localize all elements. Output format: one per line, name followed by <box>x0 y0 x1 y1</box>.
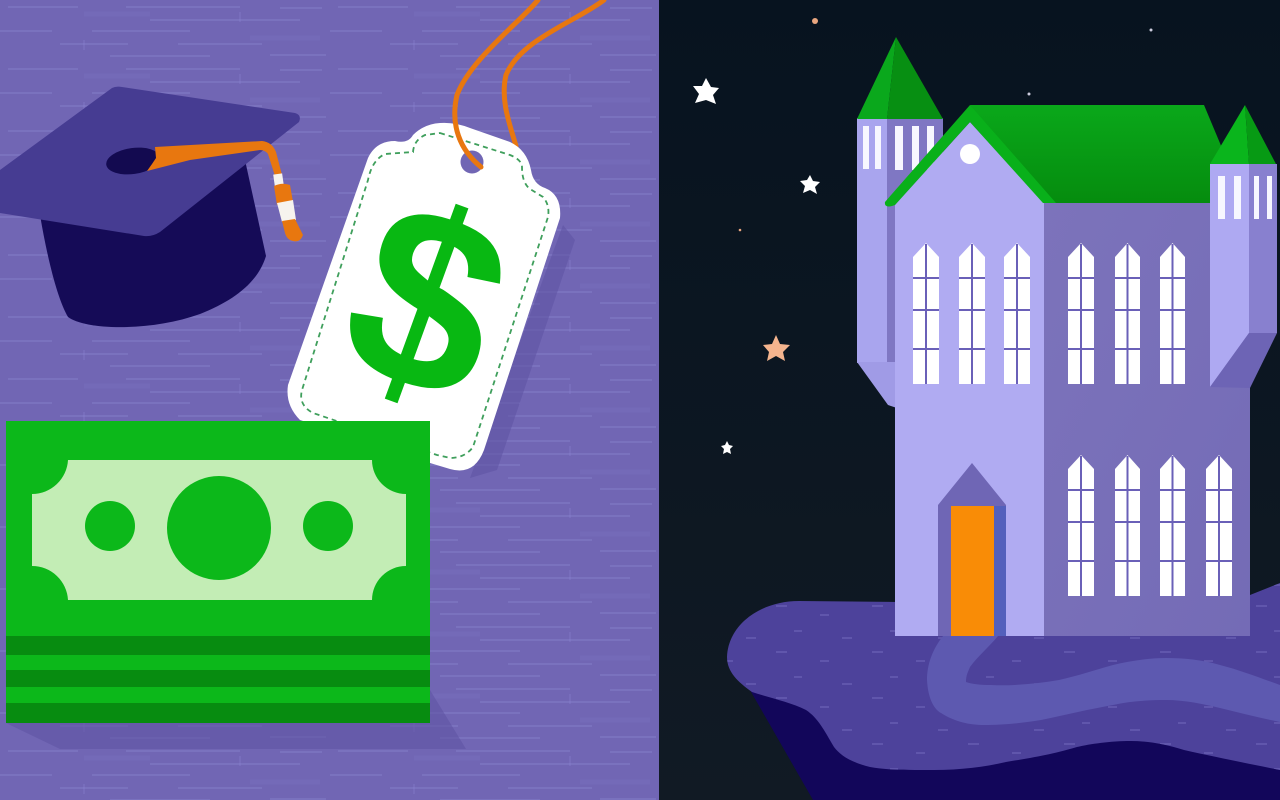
icon: price tag front string <box>455 0 538 167</box>
right tower <box>1210 105 1277 388</box>
icon: price tag shadow <box>470 225 575 478</box>
icon: banknote shadow <box>6 690 466 749</box>
icon: stack of banknotes <box>6 421 430 723</box>
icon: graduation cap <box>0 87 303 327</box>
gable round window <box>960 144 980 164</box>
icon: price tag back string <box>504 0 604 146</box>
panel: purple background <box>0 0 659 800</box>
panel: night sky background <box>659 0 1280 800</box>
panel: castle building <box>857 37 1277 636</box>
gable roof edge <box>885 105 1056 206</box>
main building front with gable <box>895 122 1044 636</box>
main building side <box>1044 203 1250 636</box>
panel: floating island <box>727 583 1280 800</box>
door <box>938 463 1006 636</box>
path: winding road <box>927 636 1280 725</box>
icon: price tag <box>288 123 560 470</box>
left tower <box>857 37 943 408</box>
icon: stars <box>693 18 1152 454</box>
text: dollar sign: $ <box>312 143 542 458</box>
main roof <box>970 105 1245 203</box>
windows <box>913 243 1232 596</box>
